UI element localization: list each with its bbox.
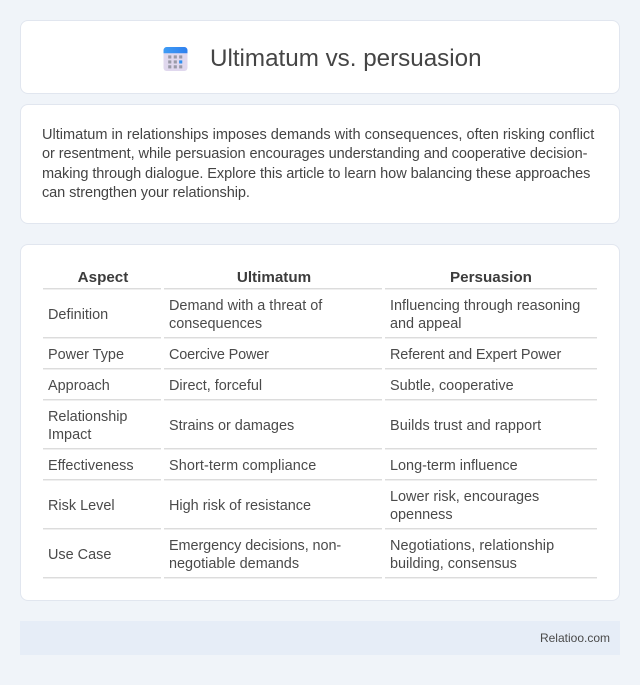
footer credit: Relatioo.com <box>540 631 610 645</box>
comparison table: Subtle, cooperative <box>390 378 514 394</box>
intro text: Ultimatum in relationships imposes demands with consequences, often risking conflict <box>42 127 594 143</box>
comparison table: negotiable demands <box>169 556 299 572</box>
intro text: can strengthen your relationship. <box>42 185 250 201</box>
comparison table: Persuasion <box>450 269 532 286</box>
comparison table: Effectiveness <box>48 458 134 474</box>
comparison table: consequences <box>169 316 262 332</box>
comparison table: Long-term influence <box>390 458 518 474</box>
comparison table: building, consensus <box>390 556 517 572</box>
comparison table: Builds trust and rapport <box>390 418 541 434</box>
comparison table: and appeal <box>390 316 461 332</box>
comparison table: Approach <box>48 378 110 394</box>
comparison table: Definition <box>48 307 108 323</box>
comparison table: Coercive Power <box>169 347 269 363</box>
comparison table: Impact <box>48 427 91 443</box>
comparison table: Lower risk, encourages <box>390 489 539 505</box>
comparison table: Influencing through reasoning <box>390 298 580 314</box>
comparison table: Negotiations, relationship <box>390 538 554 554</box>
title: Ultimatum vs. persuasion <box>210 45 482 72</box>
comparison table: Relationship <box>48 409 127 425</box>
comparison table: Referent and Expert Power <box>390 347 561 363</box>
comparison table: Ultimatum <box>237 269 311 286</box>
comparison table: High risk of resistance <box>169 498 311 514</box>
comparison table: openness <box>390 507 453 523</box>
comparison table: Power Type <box>48 347 124 363</box>
intro card <box>20 104 620 224</box>
intro text: or resentment, while persuasion encourages understanding and cooperative decision- <box>42 146 587 162</box>
comparison table: Aspect <box>78 269 128 286</box>
title card <box>20 20 620 94</box>
table card <box>20 244 620 601</box>
comparison table: Risk Level <box>48 498 115 514</box>
intro text <box>42 127 594 201</box>
footer <box>20 621 620 655</box>
comparison table: Strains or damages <box>169 418 294 434</box>
comparison table: Emergency decisions, non- <box>169 538 341 554</box>
intro text: making through dialogue. Explore this article to learn how balancing these approaches <box>42 166 590 182</box>
comparison table: Demand with a threat of <box>169 298 322 314</box>
icon: calendar <box>164 47 188 71</box>
comparison table: Direct, forceful <box>169 378 262 394</box>
comparison table: Use Case <box>48 547 111 563</box>
comparison table: Short-term compliance <box>169 458 316 474</box>
